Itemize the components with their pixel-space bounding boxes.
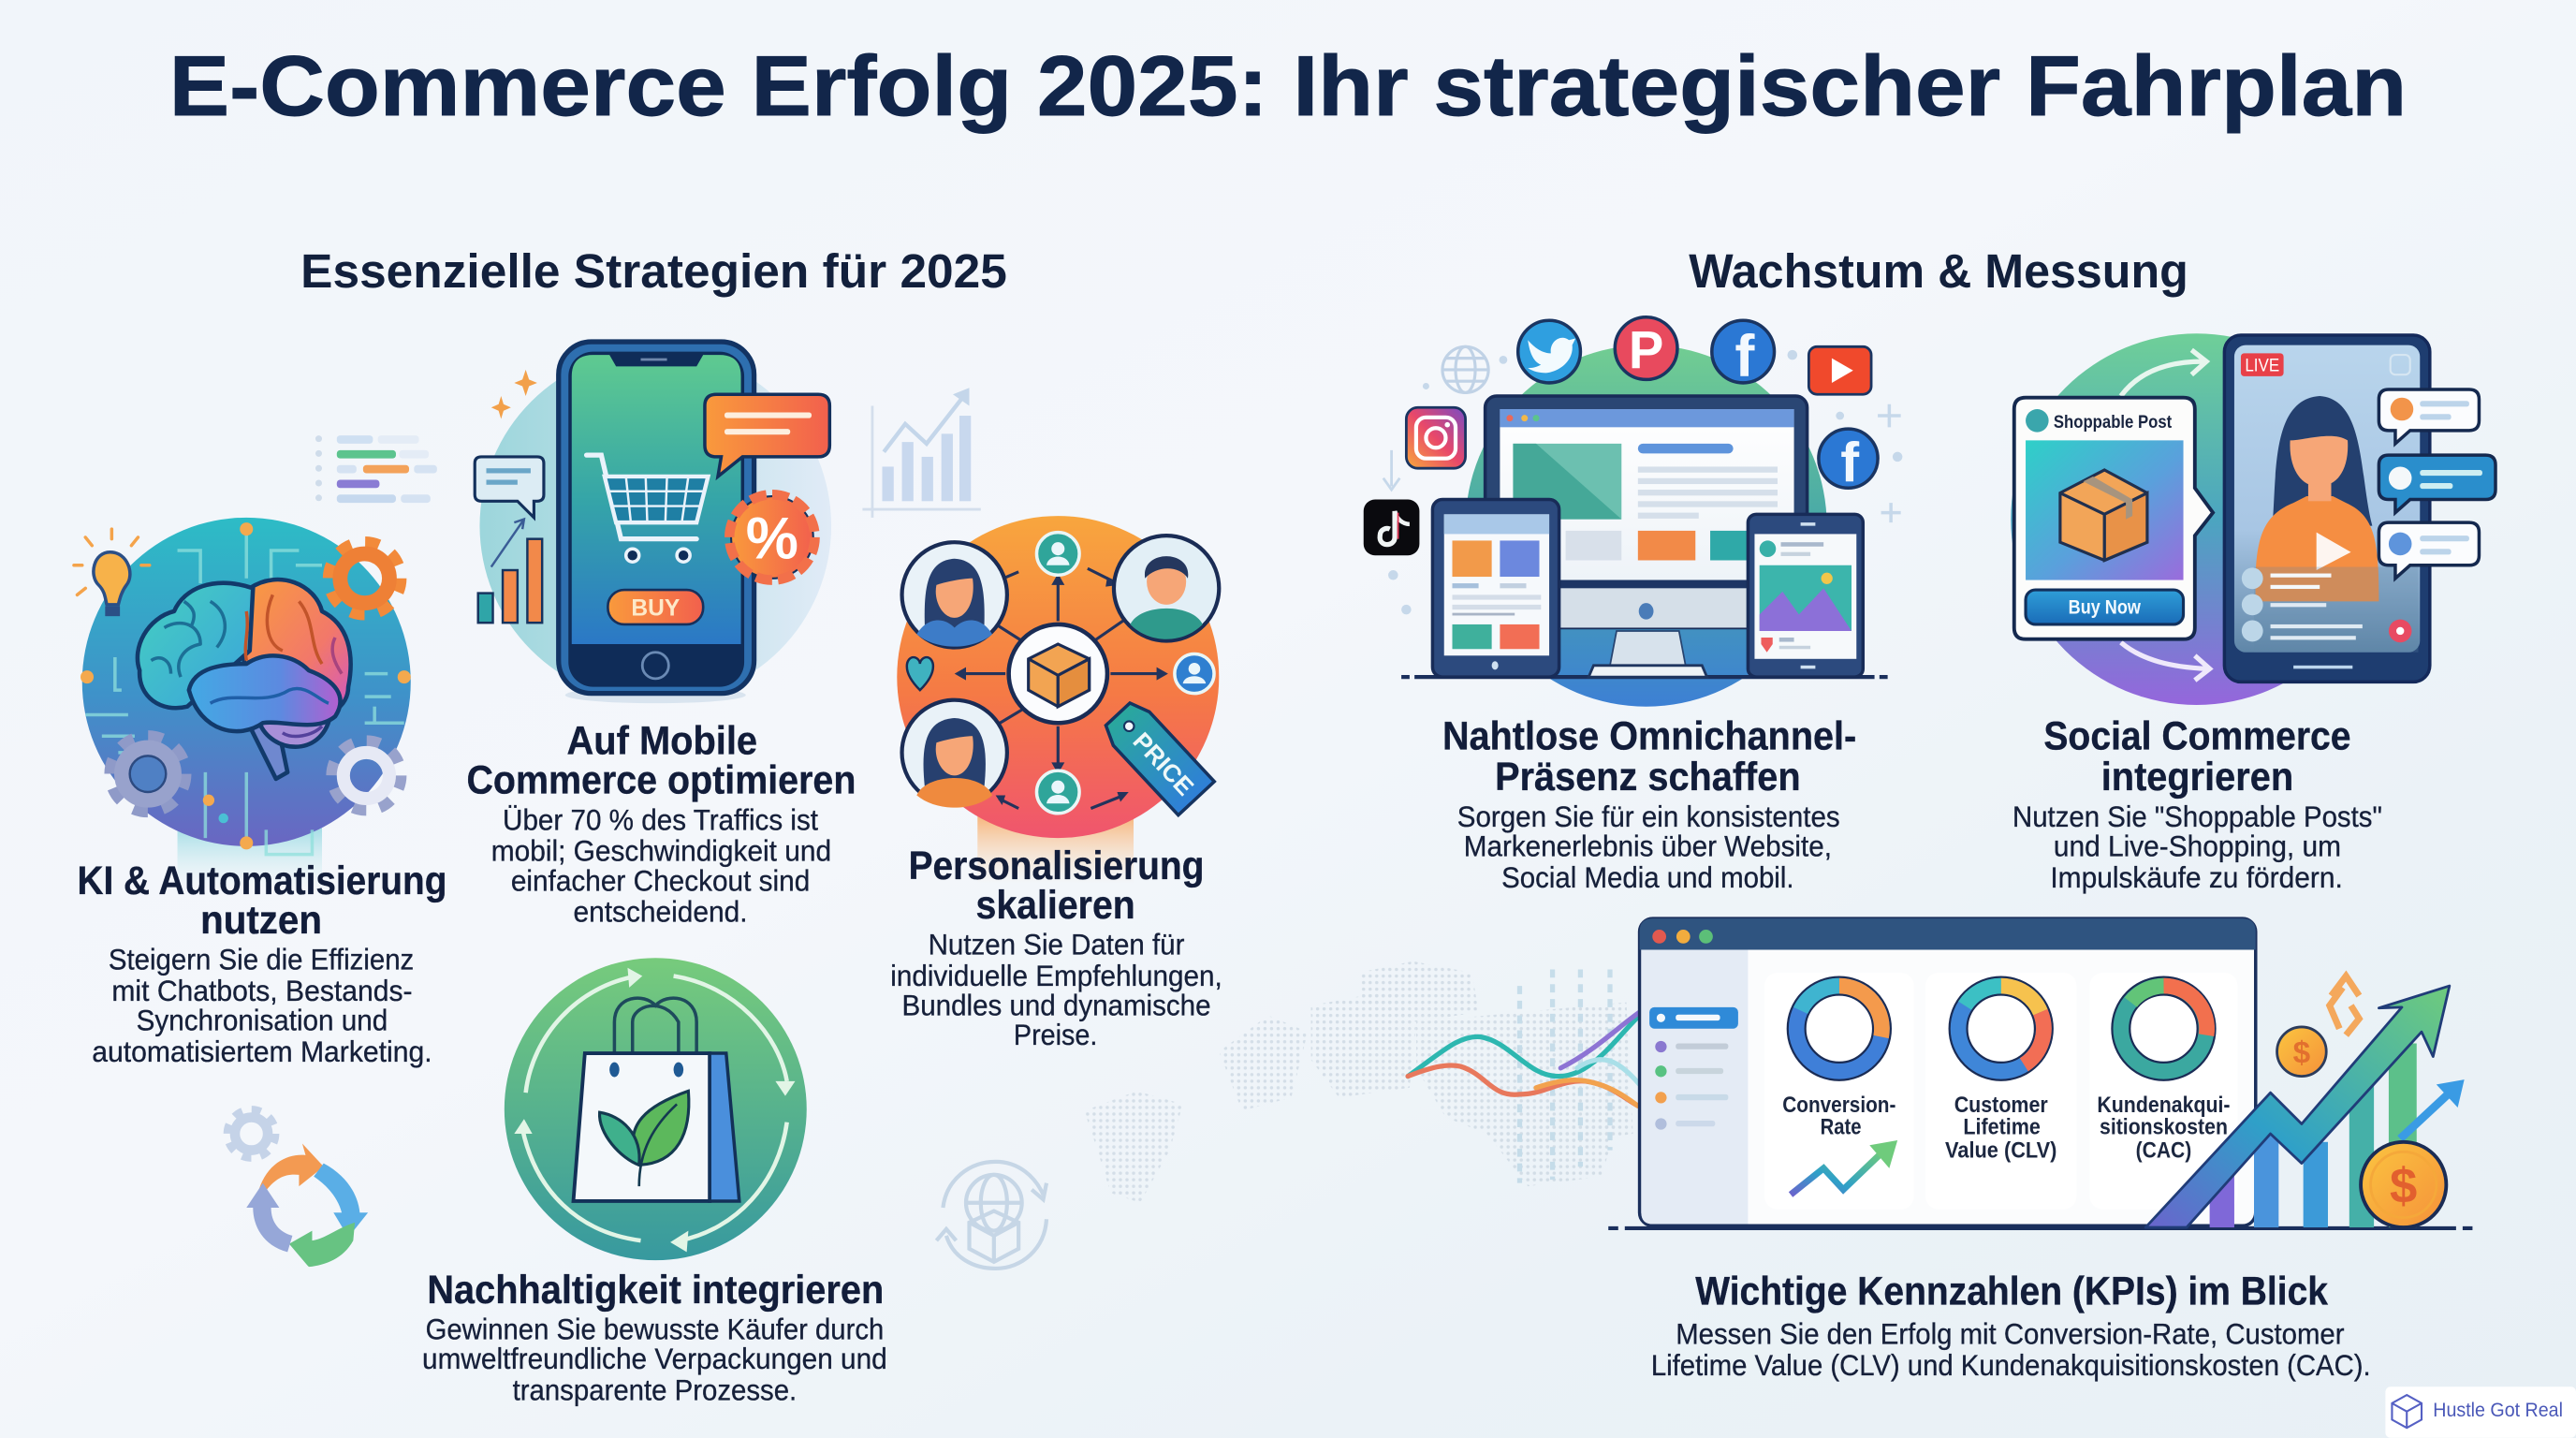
icon: Facebook right (1819, 429, 1878, 493)
card: Kundenakquisitionskosten: Kundenakqui- (2097, 1093, 2231, 1118)
text block: Nachhaltigkeit: transparente Prozesse. (513, 1372, 797, 1406)
heading: Nahtlose Omnichannel-Präsenz schaffen (1442, 713, 1856, 800)
icon: discount badge: % (746, 506, 798, 572)
text block: KI: Steigern Sie die Effizienz (109, 943, 414, 976)
card: Customer Lifetime Value (1925, 973, 2076, 1210)
heading: Nahtlose Omnichannel-Präsenz schaffen: Nahtlose Omnichannel- (1442, 713, 1856, 758)
panel: Mobile Commerce (466, 342, 981, 929)
icon: big coin: $ (2390, 1159, 2417, 1214)
icon: light bulb (74, 529, 150, 616)
text block: KPIs: Messen Sie den Erfolg mit Conversion-Rate, Customer (1676, 1317, 2345, 1351)
arrow: top (2121, 350, 2206, 396)
icon: tablet (1432, 500, 1559, 677)
decorative icon: pale line chart (862, 388, 981, 518)
heading: Wachstum und Messung: Wachstum & Messung (1689, 244, 2188, 298)
card: Customer Lifetime Value: Customer (1954, 1093, 2048, 1118)
card: Conversion-Rate: Conversion- (1782, 1093, 1895, 1118)
card: Conversion-Rate (1764, 973, 1914, 1210)
chart: wave lines (1408, 1012, 1640, 1106)
icon: heart (907, 657, 933, 690)
icon: small coin (2277, 1027, 2326, 1077)
panel: Personalisierung (890, 516, 1222, 1051)
heading: Personalisierung skalieren (909, 844, 1204, 928)
sidebar menu (1649, 1007, 1738, 1130)
decorative icon: globe box recycling (936, 1162, 1046, 1269)
icon: Instagram (1406, 407, 1466, 468)
watermark: Hustle Got Real (2433, 1400, 2563, 1421)
heading: KI und Automatisierung nutzen (77, 858, 446, 943)
card: Kundenakquisitionskosten: sitionskosten (2100, 1116, 2228, 1140)
watermark (2385, 1387, 2576, 1438)
text block: Omnichannel: Sorgen Sie für ein konsistentes (1457, 800, 1840, 833)
icon: chat bubble 2 (2378, 455, 2496, 513)
icon: user node right (1175, 654, 1214, 694)
heading: Auf Mobile Commerce optimieren: Commerce optimieren (466, 758, 856, 803)
text block: Social Commerce: und Live-Shopping, um (2054, 829, 2341, 862)
illustration: phone with cart (479, 342, 831, 703)
card: Customer Lifetime Value: Value (CLV) (1945, 1138, 2056, 1163)
icon: speech bubble orange (705, 394, 829, 477)
text block: Omnichannel: Social Media und mobil. (1501, 860, 1794, 894)
button: Buy Now (2026, 590, 2184, 624)
icon: price tag (1100, 697, 1214, 815)
icon: small coin: $ (2293, 1036, 2311, 1071)
heading: Nahtlose Omnichannel-Präsenz schaffen: Präsenz schaffen (1495, 755, 1801, 800)
heading: Social Commerce integrieren (2043, 713, 2351, 800)
panel: Nachhaltigkeit (422, 958, 887, 1406)
icon: discount badge (729, 494, 815, 580)
icon: chat bubble 1 (2378, 389, 2479, 444)
heading: Social Commerce integrieren: Social Commerce (2043, 713, 2351, 758)
illustration: brain circle (80, 518, 411, 888)
icon: brain (138, 580, 351, 779)
icon: user node bottom (1036, 770, 1079, 814)
heading: Social Commerce integrieren: integrieren (2101, 755, 2293, 800)
text block: Social Commerce: Impulskäufe zu fördern. (2050, 860, 2343, 894)
chart: rising bars and arrow (2145, 986, 2450, 1227)
text block: KPIs (1651, 1317, 2371, 1382)
title: E-Commerce Erfolg 2025: Ihr strategischer Fahrplan (169, 38, 2407, 134)
decorative icon: gear and recycle arrows (228, 1110, 368, 1267)
illustration: network circle (897, 516, 1219, 884)
text block: Personalisierung: individuelle Empfehlungen, (890, 959, 1222, 992)
text block: KI: automatisiertem Marketing. (92, 1034, 432, 1068)
panel: KI und Automatisierung (74, 518, 446, 1068)
illustration: live phone (2224, 335, 2430, 682)
illustration: green circle with arrows (505, 958, 807, 1260)
icon: Twitter (1518, 320, 1580, 383)
icon: Pinterest (1615, 317, 1677, 379)
icon: Facebook right: f (1840, 431, 1859, 493)
panel: KPIs (1608, 918, 2472, 1382)
text block: Social Commerce: Nutzen Sie "Shoppable Posts" (2012, 800, 2382, 833)
badge: LIVE: LIVE (2245, 357, 2279, 376)
avatar: man top right (1114, 536, 1219, 640)
card: shoppable post: Shoppable Post (2054, 413, 2173, 433)
icon: Facebook top (1712, 320, 1775, 389)
text block: Personalisierung: Bundles und dynamische (902, 989, 1211, 1022)
icon: speech bubble small (475, 457, 544, 518)
avatar: woman bottom left (902, 700, 1007, 808)
heading: KI und Automatisierung nutzen: nutzen (200, 898, 322, 943)
text block: Mobile: entscheidend. (574, 895, 748, 929)
text block: Personalisierung: Nutzen Sie Daten für (929, 928, 1184, 961)
panel: Omnichannel (1364, 317, 1902, 894)
illustration: dashboard window (1608, 918, 2472, 1228)
button: BUY: BUY (631, 595, 680, 621)
icon: central box (1009, 624, 1107, 723)
decorative: dotted world map (1084, 961, 1633, 1203)
text block: Social Commerce (2012, 800, 2382, 894)
arrow: bottom (2121, 642, 2210, 681)
illustration: green purple circle (2011, 333, 2382, 705)
text block: Mobile: einfacher Checkout sind (511, 863, 810, 897)
text block: Nachhaltigkeit (422, 1312, 887, 1406)
icon: grey gear left (110, 736, 185, 812)
heading: Essenzielle Strategien: Essenzielle Strategien für 2025 (300, 244, 1007, 298)
card: Kundenakquisitionskosten: (CAC) (2136, 1138, 2191, 1163)
heading: Personalisierung skalieren: Personalisierung (909, 844, 1204, 888)
text block: Personalisierung (890, 928, 1222, 1051)
icon: phone device (1748, 514, 1863, 677)
card: Kundenakquisitionskosten (2089, 973, 2237, 1210)
heading: Personalisierung skalieren: skalieren (976, 883, 1135, 928)
icon: Facebook top: f (1734, 324, 1755, 389)
icon: user node top (1036, 533, 1079, 575)
text block: KI: Synchronisation und (137, 1003, 388, 1036)
icon: orange gear (329, 542, 401, 614)
icon: shopping bag (574, 998, 739, 1201)
heading: Wichtige Kennzahlen: Wichtige Kennzahlen (KPIs) im Blick (1695, 1269, 2328, 1314)
panel: Social Commerce (2011, 333, 2496, 894)
icon: price tag: PRICE (1127, 726, 1199, 801)
button: Buy Now: Buy Now (2069, 597, 2141, 619)
avatar: woman top left (902, 542, 1007, 648)
text block: Omnichannel: Markenerlebnis über Website, (1464, 829, 1832, 862)
icon: chat bubble 3 (2378, 522, 2479, 579)
text block: Mobile: Über 70 % des Traffics ist (503, 802, 818, 836)
illustration: devices (1401, 345, 1895, 707)
icon: blue arrow (2400, 1079, 2465, 1138)
decorative: small dots and plus (1383, 350, 1902, 614)
icon: YouTube (1808, 346, 1871, 394)
text block: Mobile (491, 802, 831, 929)
button: BUY (607, 590, 703, 624)
icon: sparkles (491, 370, 537, 419)
heading: Auf Mobile Commerce optimieren (466, 719, 856, 803)
card: shoppable post (2014, 398, 2213, 639)
text block: KPIs: Lifetime Value (CLV) und Kundenakquisitionskosten (CAC). (1651, 1348, 2371, 1382)
icon: globe (1442, 346, 1488, 392)
icon: TikTok (1364, 500, 1419, 555)
card: Customer Lifetime Value: Lifetime (1963, 1116, 2041, 1140)
heading: Nachhaltigkeit integrieren: Nachhaltigkeit integrieren (427, 1268, 884, 1313)
icon: orange arrows (2330, 976, 2359, 1035)
icon: big coin (2361, 1142, 2446, 1227)
decorative icon: code list (315, 435, 437, 503)
icon: grey gear right (332, 741, 401, 810)
text block: Mobile: mobil; Geschwindigkeit und (491, 834, 831, 868)
text block: Personalisierung: Preise. (1014, 1018, 1097, 1051)
card: Conversion-Rate: Rate (1821, 1116, 1862, 1140)
icon: Pinterest: P (1629, 320, 1663, 379)
text block: Nachhaltigkeit: Gewinnen Sie bewusste Käufer durch (426, 1312, 884, 1345)
text block: Nachhaltigkeit: umweltfreundliche Verpackungen und (422, 1342, 887, 1375)
text block: KI: mit Chatbots, Bestands- (111, 974, 413, 1007)
text block: KI (92, 943, 432, 1068)
heading: KI und Automatisierung nutzen: KI & Automatisierung (77, 858, 446, 903)
heading: Auf Mobile Commerce optimieren: Auf Mobile (567, 719, 757, 764)
icon: small bar chart (478, 520, 542, 623)
text block: Omnichannel (1457, 800, 1840, 894)
